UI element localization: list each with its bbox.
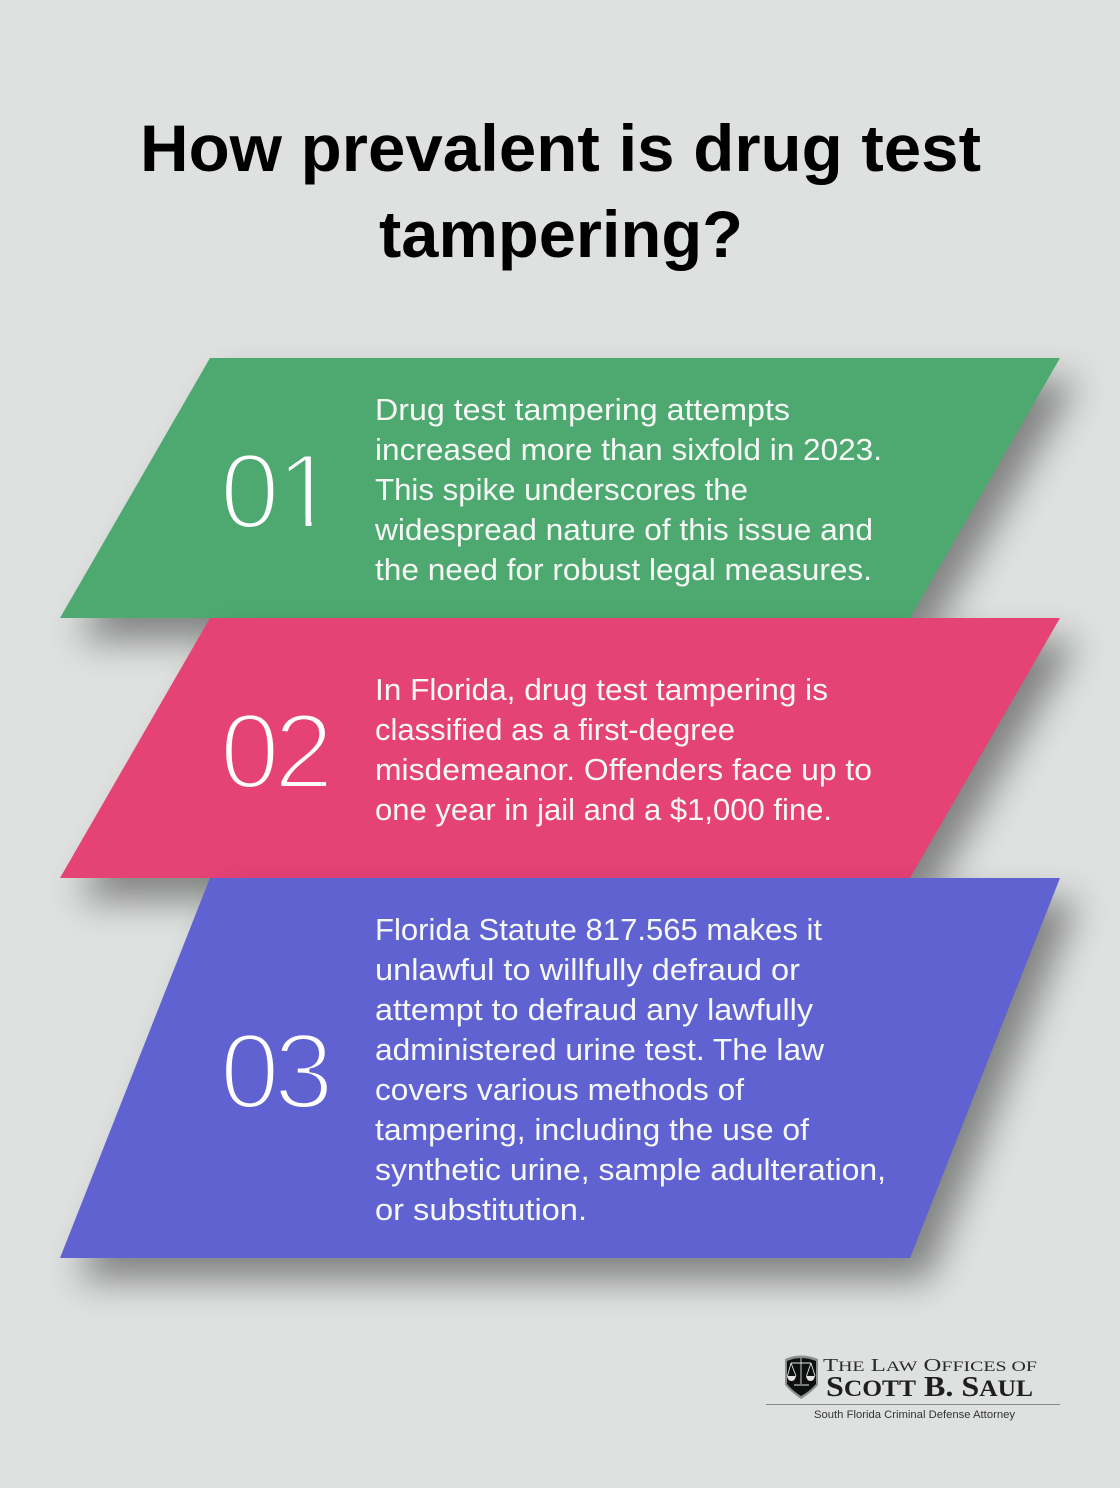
title: How prevalent is drug test bbox=[140, 111, 981, 185]
text block 03: covers various methods of bbox=[375, 1073, 745, 1107]
text block 01 bbox=[374, 393, 882, 587]
text block 03: unlawful to willfully defraud or bbox=[375, 953, 800, 987]
text block 03: administered urine test. The law bbox=[375, 1033, 825, 1067]
title bbox=[140, 111, 981, 271]
text block 03: attempt to defraud any lawfully bbox=[375, 993, 814, 1027]
text block 02: classified as a first-degree bbox=[375, 713, 735, 747]
text block 02: In Florida, drug test tampering is bbox=[375, 673, 828, 707]
panel shape: blue parallelogram bbox=[60, 878, 1060, 1258]
text block 03: or substitution. bbox=[375, 1193, 587, 1227]
text block 01: the need for robust legal measures. bbox=[375, 553, 872, 587]
text block 01: increased more than sixfold in 2023. bbox=[375, 433, 882, 467]
text block 03 bbox=[375, 913, 886, 1227]
firm name: T HE L AW O FFICES OF bbox=[823, 1355, 1037, 1375]
panel: 01 green bbox=[60, 358, 1078, 640]
text block 03: synthetic urine, sample adulteration, bbox=[375, 1153, 886, 1187]
number 02: 02 bbox=[220, 691, 334, 811]
number 03: 03 bbox=[220, 1011, 334, 1131]
text block 03: Florida Statute 817.565 makes it bbox=[375, 913, 823, 947]
attorney name: SCOTT B. S AUL bbox=[826, 1371, 1033, 1403]
text block 03: tampering, including the use of bbox=[375, 1113, 810, 1147]
text block 02: misdemeanor. Offenders face up to bbox=[375, 753, 872, 787]
text block 02 bbox=[375, 673, 872, 827]
panel shape: green parallelogram bbox=[60, 358, 1060, 618]
panel: 02 pink bbox=[60, 618, 1078, 900]
panel shape: pink parallelogram bbox=[60, 618, 1060, 878]
logo bbox=[766, 1355, 1060, 1421]
text block 01: This spike underscores the bbox=[375, 473, 748, 507]
title: tampering? bbox=[379, 197, 743, 271]
text block 02: one year in jail and a $1,000 fine. bbox=[375, 793, 832, 827]
text block 01: Drug test tampering attempts bbox=[375, 393, 790, 427]
number 01: 01 bbox=[220, 431, 336, 551]
panel: 03 blue bbox=[60, 878, 1078, 1280]
text block 01: widespread nature of this issue and bbox=[374, 513, 873, 547]
icon: shield with scales bbox=[785, 1356, 818, 1399]
tagline: South Florida Criminal Defense Attorney bbox=[814, 1409, 1016, 1421]
